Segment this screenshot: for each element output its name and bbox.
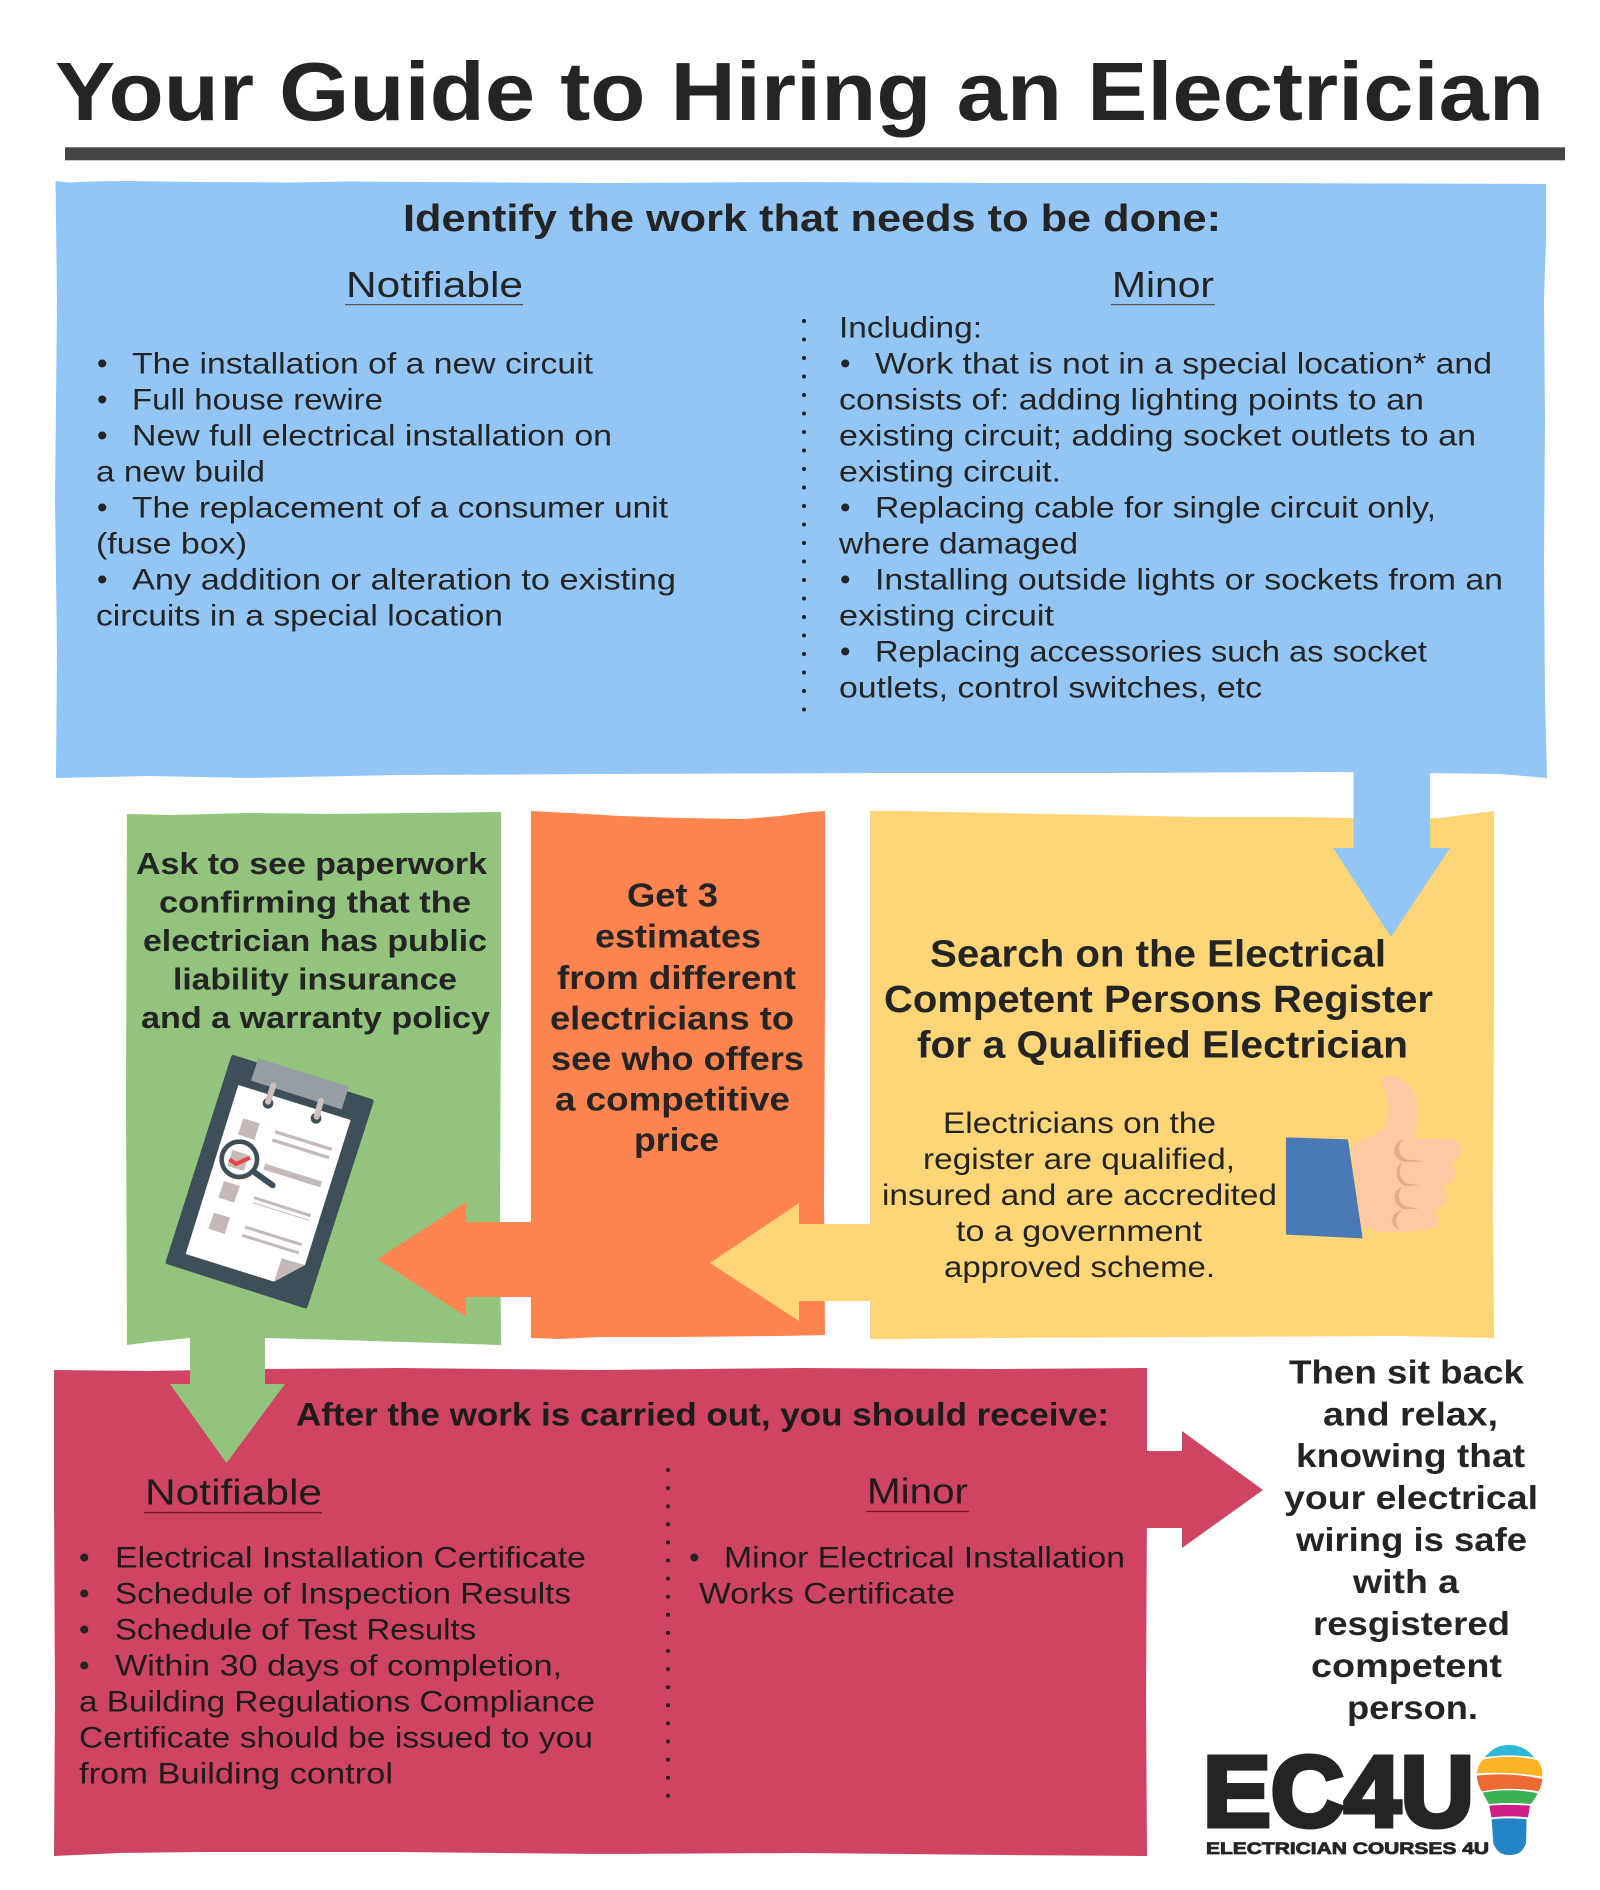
text: paperwork: liability insurance xyxy=(173,962,457,996)
text: sit back and relax: resgistered xyxy=(1313,1605,1510,1642)
text: register explanation: to a government xyxy=(956,1215,1203,1248)
column: minor: existing circuit. xyxy=(839,456,1061,488)
arrow: green down xyxy=(170,1336,285,1463)
column: minor: where damaged xyxy=(838,528,1078,560)
heading: identify: Identify the work that needs to be done: xyxy=(403,198,1221,240)
text: paperwork: Ask to see paperwork xyxy=(136,846,488,881)
text: sit back and relax: person. xyxy=(1347,1689,1478,1726)
column: notifiable documents: Within 30 days of completion, xyxy=(115,1650,562,1682)
arrow: yellow left xyxy=(710,1203,870,1321)
text: register explanation: insured and are accredited xyxy=(882,1179,1277,1212)
column: notifiable documents: Schedule of Test Results xyxy=(115,1614,476,1646)
text: paperwork: confirming that the xyxy=(159,884,471,920)
column: notifiable: • xyxy=(97,492,108,524)
title: Your Guide to Hiring an Electrician xyxy=(55,45,1544,138)
subheading: notifiable documents: Notifiable xyxy=(145,1472,322,1512)
text: get 3 estimates: price xyxy=(634,1121,719,1158)
text: get 3 estimates: a competitive xyxy=(555,1080,790,1118)
text: sit back and relax: Then sit back xyxy=(1289,1354,1525,1390)
column: minor: consists of: adding lighting points to an xyxy=(839,384,1424,416)
text: register explanation: Electricians on the xyxy=(943,1107,1216,1140)
text: get 3 estimates: Get 3 xyxy=(627,876,718,914)
arrow: blue down xyxy=(1333,770,1450,937)
column: minor: • xyxy=(840,492,851,524)
arrow: orange left xyxy=(377,1202,531,1316)
text: register explanation xyxy=(882,1107,1277,1284)
column: notifiable documents: • xyxy=(79,1650,90,1682)
heading: search: for a Qualified Electrician xyxy=(917,1024,1408,1066)
column: minor xyxy=(838,264,1503,704)
panel: three estimates xyxy=(531,811,825,1339)
column: notifiable documents: Electrical Installation Certificate xyxy=(115,1542,586,1574)
text: get 3 estimates: see who offers xyxy=(551,1040,804,1077)
column: notifiable xyxy=(96,264,676,632)
text: get 3 estimates xyxy=(550,876,804,1158)
column: notifiable documents: Certificate should be issued to you xyxy=(79,1722,593,1754)
column: notifiable documents: • xyxy=(79,1542,90,1574)
column: notifiable: Full house rewire xyxy=(132,384,383,416)
text: paperwork: electrician has public xyxy=(143,923,487,958)
text: sit back and relax: knowing that xyxy=(1296,1437,1525,1474)
column: notifiable documents: • xyxy=(79,1578,90,1610)
dotted divider xyxy=(802,321,806,710)
text: sit back and relax xyxy=(1284,1354,1538,1726)
column: minor: Replacing accessories such as socket xyxy=(875,636,1428,668)
icon: clipboard xyxy=(168,1057,371,1306)
text: paperwork xyxy=(136,846,491,1035)
text: register explanation: approved scheme. xyxy=(944,1251,1215,1284)
arrow: red right xyxy=(1146,1431,1263,1548)
text: sit back and relax: wiring is safe xyxy=(1295,1521,1527,1558)
column: notifiable: circuits in a special location xyxy=(96,600,503,632)
column: minor: existing circuit xyxy=(839,600,1055,632)
column: notifiable: New full electrical installation on xyxy=(132,420,612,452)
dotted divider xyxy=(666,1470,670,1798)
panel: search register xyxy=(870,811,1494,1339)
column: minor: Including: xyxy=(839,312,982,344)
column: notifiable: • xyxy=(97,348,108,380)
column: notifiable: • xyxy=(97,384,108,416)
logo: EC4U: EC4U xyxy=(1203,1736,1474,1848)
column: notifiable: • xyxy=(97,564,108,596)
heading: search: Search on the Electrical xyxy=(930,934,1386,976)
column: minor documents xyxy=(689,1470,1125,1610)
column: notifiable documents xyxy=(79,1472,595,1790)
column: notifiable: The installation of a new circuit xyxy=(132,348,594,380)
column: minor: existing circuit; adding socket outlets to an xyxy=(839,420,1476,452)
column: minor: Installing outside lights or sockets from an xyxy=(875,564,1503,596)
column: notifiable documents: • xyxy=(79,1614,90,1646)
column: notifiable: a new build xyxy=(96,456,265,488)
column: minor: Work that is not in a special location* and xyxy=(875,348,1492,380)
text: sit back and relax: competent xyxy=(1311,1647,1502,1684)
column: notifiable: • xyxy=(97,420,108,452)
column: notifiable documents: Schedule of Inspection Results xyxy=(115,1578,571,1610)
text: get 3 estimates: estimates xyxy=(595,918,761,954)
heading: after the work: After the work is carried out, you should receive: xyxy=(296,1396,1109,1432)
column: minor: Replacing cable for single circuit only, xyxy=(875,492,1436,524)
heading: search: Competent Persons Register xyxy=(884,979,1433,1021)
subheading: minor documents: Minor xyxy=(867,1470,968,1512)
column: minor documents: • xyxy=(689,1542,700,1574)
column: notifiable: (fuse box) xyxy=(96,528,247,560)
column: minor documents: Works Certificate xyxy=(699,1578,955,1610)
text: get 3 estimates: electricians to xyxy=(550,1000,794,1036)
panel: after the work xyxy=(54,1368,1147,1856)
column: notifiable: Any addition or alteration to existing xyxy=(132,564,676,596)
text: sit back and relax: your electrical xyxy=(1284,1479,1538,1516)
icon: rainbow light bulb xyxy=(1477,1745,1542,1855)
column: notifiable: The replacement of a consumer unit xyxy=(132,492,669,524)
column: notifiable documents: a Building Regulations Compliance xyxy=(79,1686,595,1718)
title rule xyxy=(65,147,1565,160)
logo: EC4U: ELECTRICIAN COURSES 4U xyxy=(1206,1839,1489,1858)
column: minor: outlets, control switches, etc xyxy=(839,672,1262,704)
panel: paperwork xyxy=(126,812,501,1345)
heading: search xyxy=(884,934,1433,1066)
text: sit back and relax: and relax, xyxy=(1323,1396,1498,1432)
column: minor: • xyxy=(840,564,851,596)
subheading: notifiable: Notifiable xyxy=(346,264,523,305)
column: minor: • xyxy=(840,636,851,668)
column: minor: • xyxy=(840,348,851,380)
text: register explanation: register are qualified, xyxy=(923,1143,1235,1176)
text: sit back and relax: with a xyxy=(1352,1563,1460,1600)
text: get 3 estimates: from different xyxy=(557,959,796,996)
column: minor documents: Minor Electrical Installation xyxy=(724,1542,1125,1574)
column: notifiable documents: from Building control xyxy=(79,1758,393,1790)
icon: thumbs up xyxy=(1286,1076,1461,1238)
text: paperwork: and a warranty policy xyxy=(141,1000,491,1035)
panel: identify the work xyxy=(55,181,1547,778)
subheading: minor: Minor xyxy=(1112,264,1214,305)
